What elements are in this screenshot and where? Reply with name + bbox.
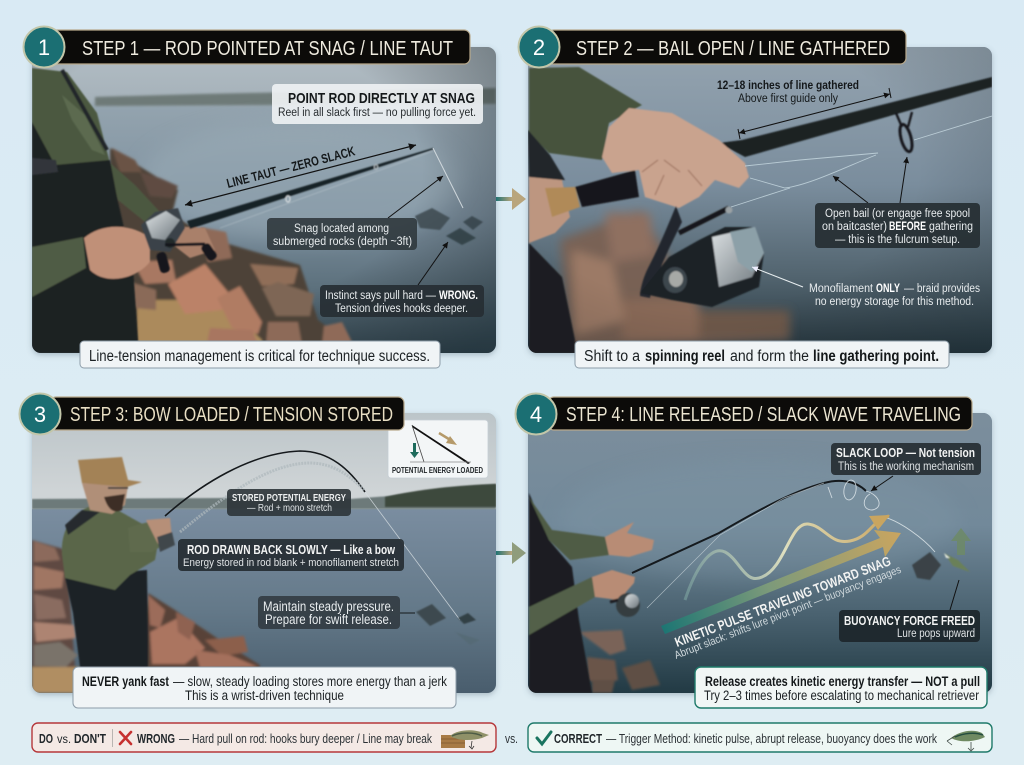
callout: stored potential energy: STORED POTENTIAL ENERGY xyxy=(232,492,346,504)
label: line taut zero slack: LINE TAUT — ZERO SLACK xyxy=(225,143,357,191)
label: kinetic pulse traveling toward snag: Abrupt slack: shifts lure pivot point — buoyancy engages xyxy=(673,564,903,662)
caption: spinning reel: spinning reel xyxy=(645,348,725,365)
arrow: step 1 to step 2 xyxy=(496,188,526,210)
callout: open bail: on baitcaster) xyxy=(822,221,887,233)
callout: monofilament only: no energy storage for this method. xyxy=(815,296,974,308)
photo: angler pointing rod at snag xyxy=(32,47,496,353)
callout: point rod directly at snag: Reel in all slack first — no pulling force yet. xyxy=(278,107,476,119)
callout: rod drawn back slowly xyxy=(178,539,404,571)
bar: do vs don't wrong method: — Hard pull on rod: hooks bury deeper / Line may break xyxy=(179,732,433,746)
icon: lure snagged in wood xyxy=(441,730,489,749)
caption: never yank fast: This is a wrist-driven technique xyxy=(185,688,344,703)
caption: line tension: Line-tension management is critical for technique success. xyxy=(89,348,430,365)
callout: open bail: BEFORE xyxy=(889,221,926,233)
callout: instinct is wrong: Tension drives hooks deeper. xyxy=(335,303,468,315)
caption: never yank fast: — slow, steady loading stores more energy than a jerk xyxy=(173,674,447,689)
callout: buoyancy force freed xyxy=(839,580,980,642)
callout: point rod directly at snag xyxy=(272,84,483,124)
label: versus: vs. xyxy=(505,732,518,746)
heading: step 2: STEP 2 — BAIL OPEN / LINE GATHERED xyxy=(576,38,890,60)
callout: open bail: Open bail (or engage free spool xyxy=(825,208,970,220)
callout: slack loop: SLACK LOOP — Not tension xyxy=(836,445,975,460)
label: 12 to 18 inches of line gathered: Above first guide only xyxy=(738,93,838,105)
callout: buoyancy force freed: BUOYANCY FORCE FREED xyxy=(844,613,975,628)
callout: buoyancy force freed: Lure pops upward xyxy=(897,628,975,640)
callout: monofilament only: ONLY xyxy=(876,283,900,295)
photo: angler drawing rod back like a bow xyxy=(32,413,496,693)
callout: stored potential energy xyxy=(227,489,351,516)
bar: do vs don't wrong method: DON'T xyxy=(74,731,106,746)
callout: rod drawn back slowly: Energy stored in rod blank + monofilament stretch xyxy=(183,557,399,569)
caption: release creates kinetic energy transfer xyxy=(695,667,987,708)
panel: step 3 xyxy=(20,394,496,708)
label: 12 to 18 inches of line gathered: 12–18 inches of line gathered xyxy=(717,80,859,92)
callout: snag location: submerged rocks (depth ~3ft) xyxy=(273,236,412,248)
panel: step 4 xyxy=(516,394,992,708)
callout: stored potential energy: — Rod + mono stretch xyxy=(247,503,332,514)
heading: step 4: 4 xyxy=(530,402,542,427)
callout: slack loop xyxy=(831,443,981,491)
heading: step 2 xyxy=(518,26,906,68)
inset diagram: potential energy loaded: POTENTIAL ENERGY LOADED xyxy=(392,466,483,475)
heading: step 4 xyxy=(516,394,972,434)
callout: maintain steady pressure: Prepare for swift release. xyxy=(265,612,392,627)
heading: step 1 xyxy=(24,26,470,68)
callout: point rod directly at snag: POINT ROD DIRECTLY AT SNAG xyxy=(288,90,475,107)
bar: do vs don't wrong method: DO xyxy=(39,731,53,746)
callout: monofilament only xyxy=(752,267,980,308)
callout: open bail: gathering xyxy=(929,221,973,233)
callout: maintain steady pressure xyxy=(258,596,415,629)
callout: open bail xyxy=(815,157,980,248)
heading: step 1: STEP 1 — ROD POINTED AT SNAG / LINE TAUT xyxy=(82,38,453,60)
caption: never yank fast xyxy=(73,667,456,708)
caption: line tension xyxy=(80,341,440,368)
callout: instinct is wrong: WRONG. xyxy=(439,290,478,302)
callout: open bail: — this is the fulcrum setup. xyxy=(835,234,960,246)
callout: maintain steady pressure: Maintain steady pressure. xyxy=(263,599,394,614)
photo: line released with slack wave xyxy=(528,413,992,693)
heading: step 3 xyxy=(20,394,404,434)
callout: snag location: Snag located among xyxy=(294,223,389,235)
bar: do vs don't wrong method: vs. xyxy=(57,732,71,746)
caption: never yank fast: NEVER yank fast xyxy=(82,674,169,689)
panel: step 1 xyxy=(24,26,496,368)
heading: step 3: STEP 3: BOW LOADED / TENSION STORED xyxy=(70,404,393,426)
caption: release creates kinetic energy transfer: Try 2–3 times before escalating to mechanical retriever xyxy=(704,688,979,703)
inset diagram: potential energy loaded xyxy=(388,420,488,478)
heading: step 3: 3 xyxy=(34,402,46,427)
callout: instinct is wrong xyxy=(320,242,484,317)
caption: spinning reel: Shift to a xyxy=(584,348,640,365)
bar: correct method: CORRECT xyxy=(554,731,602,746)
bar: correct method xyxy=(528,723,992,752)
callout: monofilament only: — braid provides xyxy=(904,283,980,295)
bar: do vs don't wrong method xyxy=(32,723,496,752)
heading: step 1: 1 xyxy=(38,35,50,60)
arrow: line taut span xyxy=(185,145,416,205)
label: 12 to 18 inches of line gathered xyxy=(717,80,891,139)
caption: spinning reel: and form the xyxy=(730,348,809,365)
caption: spinning reel xyxy=(575,341,949,368)
bar: do vs don't wrong method: WRONG xyxy=(137,731,175,746)
callout: rod drawn back slowly: ROD DRAWN BACK SLOWLY — Like a bow xyxy=(187,542,396,557)
callout: instinct is wrong: Instinct says pull hard — xyxy=(325,290,436,302)
bar: correct method: — Trigger Method: kinetic pulse, abrupt release, buoyancy does the work xyxy=(606,732,938,746)
callout: slack loop: This is the working mechanism xyxy=(838,461,974,473)
arrow: step 3 to step 4 xyxy=(496,542,526,564)
panel: step 2 xyxy=(518,26,992,368)
caption: spinning reel: line gathering point. xyxy=(813,348,939,365)
photo: hand with spinning reel and gathered line xyxy=(528,47,992,353)
icon: free lure xyxy=(947,731,985,751)
heading: step 2: 2 xyxy=(533,35,545,60)
label: kinetic pulse traveling toward snag: KINETIC PULSE TRAVELING TOWARD SNAG xyxy=(673,553,893,650)
callout: monofilament only: Monofilament xyxy=(809,283,874,295)
callout: snag location xyxy=(267,176,443,250)
angler body xyxy=(32,68,433,353)
